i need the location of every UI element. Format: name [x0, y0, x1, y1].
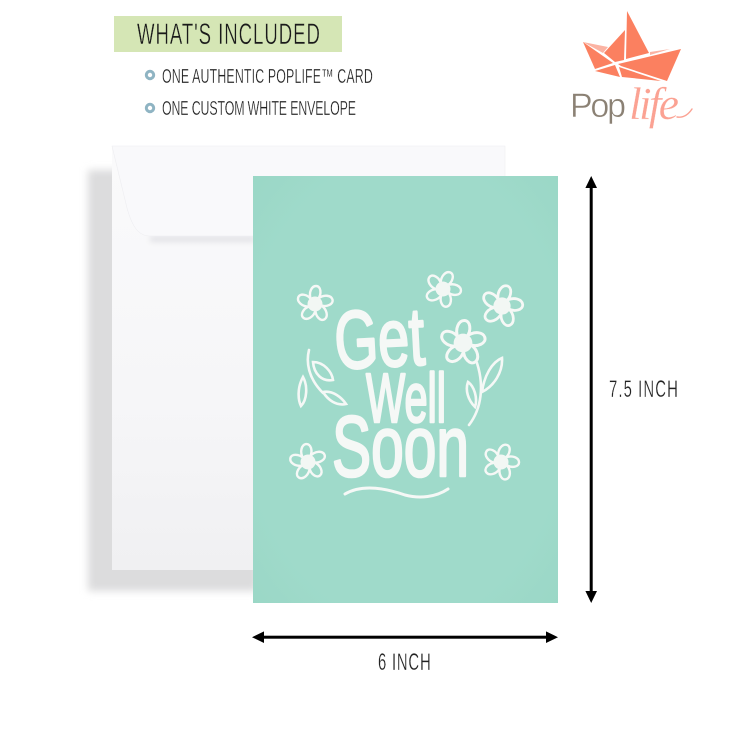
lettering: Get Well Soon — [332, 291, 469, 495]
list: included items — [146, 65, 373, 120]
envelope flap — [112, 146, 505, 236]
label: width: 6 INCH — [378, 650, 431, 676]
card background — [253, 176, 558, 603]
text: envelope item: ONE CUSTOM WHITE ENVELOPE — [162, 97, 356, 120]
lettering: Get Well Soon: Well — [366, 359, 446, 437]
envelope body — [112, 146, 505, 570]
logo: Poplife — [570, 11, 692, 129]
label: height: 7.5 INCH — [609, 377, 678, 403]
bullet: envelope item — [146, 104, 154, 112]
arrow: height — [585, 176, 597, 603]
wordmark: life: life — [629, 78, 679, 129]
decoration: left leaves — [299, 350, 346, 406]
arrow: width — [252, 631, 558, 643]
card: Get Well Soon — [253, 176, 558, 603]
decoration: swash — [345, 488, 448, 497]
icon: origami boat — [583, 11, 681, 81]
envelope shadow — [88, 170, 258, 591]
decoration: flowers — [286, 266, 527, 484]
bullet: card item — [146, 71, 154, 79]
text: card item: ONE AUTHENTIC POPLIFE™ CARD — [162, 65, 373, 88]
heading: what's included: WHAT'S INCLUDED — [137, 18, 320, 51]
lettering: Get Well Soon: Get — [332, 291, 427, 387]
flap shadow — [150, 236, 255, 242]
lettering: Get Well Soon: Soon — [332, 399, 469, 495]
wordmark: Pop: Pop — [570, 87, 626, 125]
wordmark: life tail flourish — [677, 109, 692, 117]
decoration: right stem and leaves — [467, 358, 502, 425]
envelope — [88, 146, 505, 591]
